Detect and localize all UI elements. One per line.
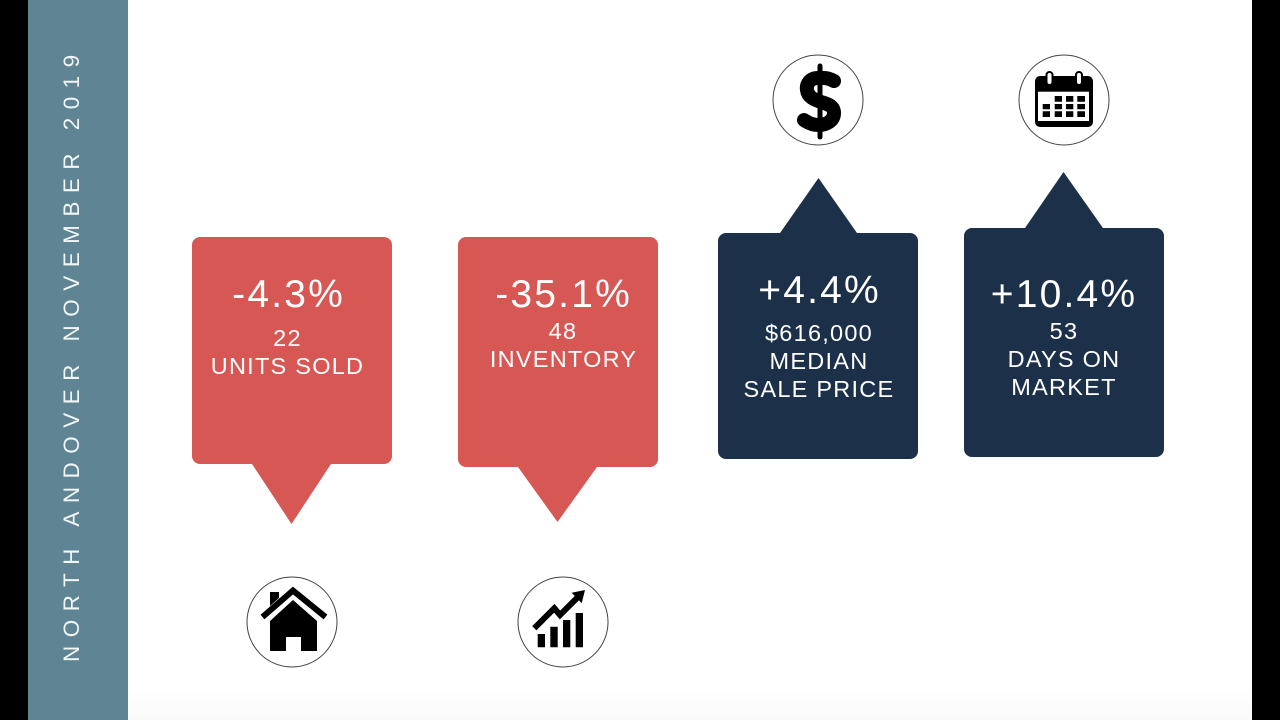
panel: inventory — [458, 237, 658, 522]
callout shape — [718, 178, 918, 459]
sidebar title: NORTH ANDOVER NOVEMBER 2019 — [59, 46, 84, 662]
value: 22 — [273, 325, 302, 351]
icon: growth chart — [518, 576, 608, 668]
label: MARKET — [1011, 374, 1117, 400]
sidebar — [28, 0, 128, 720]
label: INVENTORY — [490, 346, 637, 372]
label: UNITS SOLD — [211, 352, 364, 378]
change: +4.4% — [758, 269, 881, 312]
label: SALE PRICE — [744, 376, 894, 402]
panel: median sale price — [718, 178, 918, 459]
callout shape — [192, 237, 392, 524]
value: 53 — [1050, 318, 1078, 344]
label: MEDIAN — [770, 348, 868, 374]
label — [1008, 346, 1120, 400]
icon: dollar sign — [772, 54, 864, 146]
label: DAYS ON — [1008, 346, 1120, 372]
change: -35.1% — [495, 273, 632, 316]
icon: house — [246, 576, 338, 668]
icon: calendar — [1018, 54, 1110, 146]
panel: units sold — [192, 237, 392, 524]
change: +10.4% — [991, 273, 1137, 316]
value: $616,000 — [765, 320, 873, 346]
callout shape — [458, 237, 658, 522]
panel: days on market — [964, 172, 1164, 457]
value: 48 — [549, 318, 577, 344]
callout shape — [964, 172, 1164, 457]
label — [744, 348, 894, 402]
change: -4.3% — [232, 273, 345, 316]
